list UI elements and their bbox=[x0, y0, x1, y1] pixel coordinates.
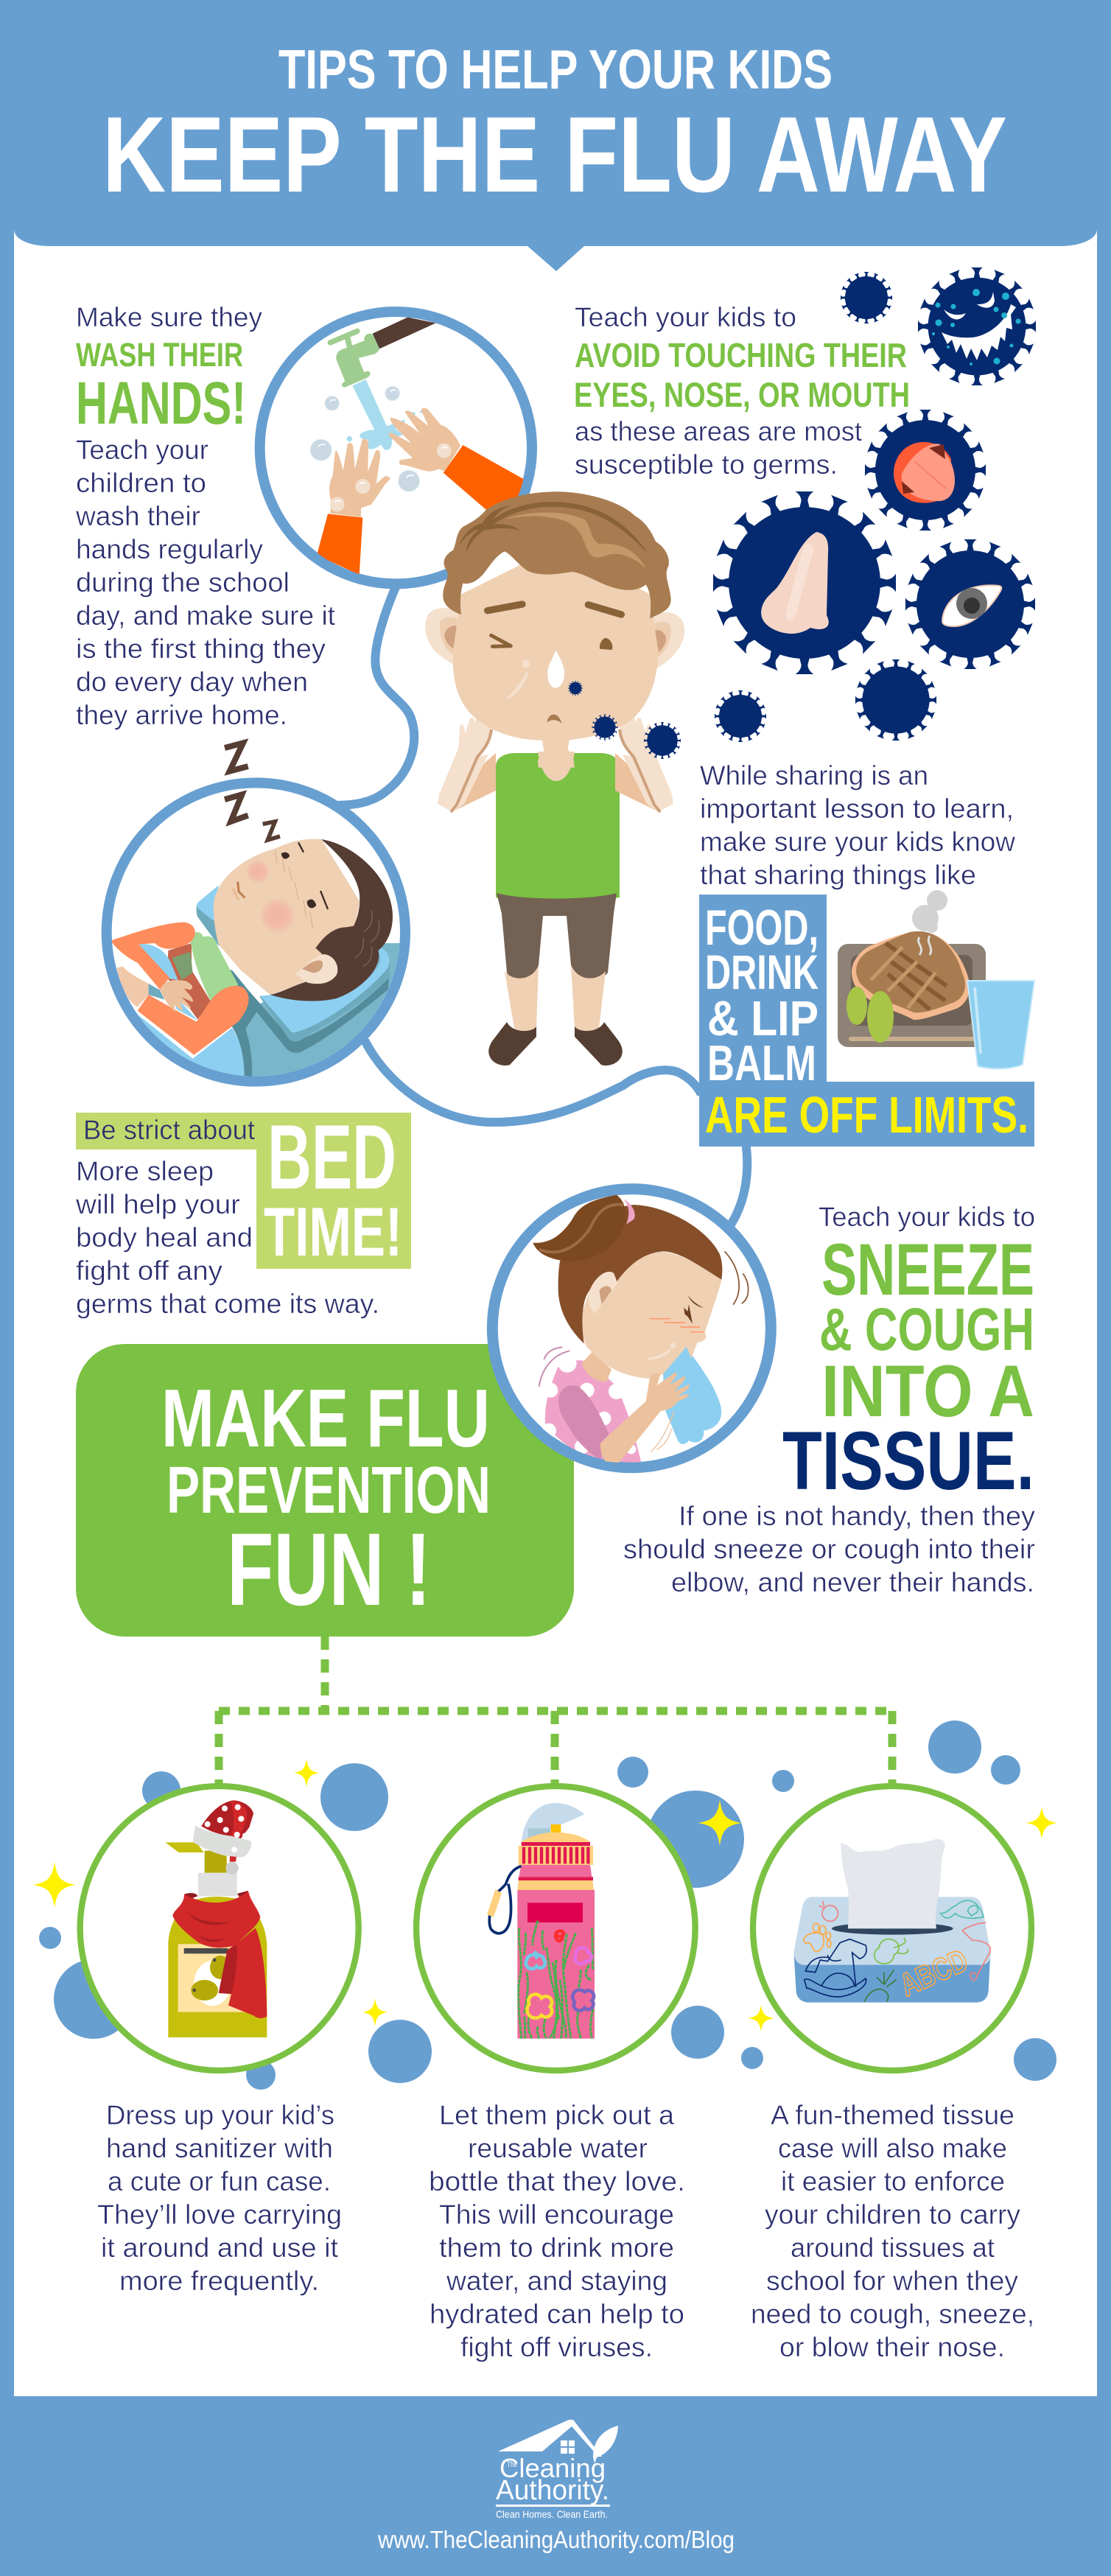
right arm bbox=[615, 716, 673, 813]
footer logo: The bbox=[507, 2460, 517, 2469]
eye bbox=[942, 585, 1001, 626]
eyes and wrinkles bbox=[281, 853, 316, 908]
text block: sharing: that sharing things like bbox=[700, 860, 976, 890]
meadow pattern bbox=[519, 1921, 593, 2039]
text block: sharing: important lesson to learn, bbox=[700, 794, 1014, 824]
icon: girl sneezing circle bbox=[492, 1189, 771, 1468]
santa hat bbox=[201, 1800, 253, 1842]
ear bbox=[295, 954, 337, 984]
logo roof bbox=[498, 2420, 602, 2457]
text block: sanitizer: a cute or fun case. bbox=[108, 2166, 331, 2197]
text block: sleep: body heal and bbox=[76, 1222, 253, 1253]
text block: water bottle: Let them pick out a bbox=[439, 2100, 674, 2130]
text block: avoid touching: as these areas are most bbox=[575, 416, 863, 447]
text block: wash hands: day, and make sure it bbox=[76, 601, 336, 631]
text block: sleep bbox=[75, 1156, 379, 1319]
pipe bbox=[373, 318, 436, 349]
text block: water bottle: This will encourage bbox=[439, 2199, 674, 2230]
icon: hand washing circle bbox=[260, 312, 532, 584]
hair bbox=[270, 839, 393, 1001]
text block: tissue case: A fun-themed tissue bbox=[771, 2100, 1014, 2130]
header banner bbox=[0, 0, 1111, 271]
tissue bbox=[663, 1347, 721, 1444]
text block: sneeze bbox=[623, 1202, 1036, 1597]
text block: sneeze: If one is not handy, then they bbox=[679, 1501, 1036, 1531]
text block: sneeze: elbow, and never their hands. bbox=[671, 1567, 1034, 1597]
hair bbox=[558, 1205, 722, 1343]
heading: into a: INTO A bbox=[821, 1350, 1034, 1432]
heading: tissue: TISSUE. bbox=[782, 1415, 1034, 1507]
torso bbox=[167, 943, 211, 1019]
connector line between tips bbox=[333, 582, 747, 1225]
nose germ bbox=[713, 491, 896, 674]
soap bubbles bbox=[310, 386, 419, 491]
germs on boy bbox=[568, 681, 681, 759]
icon: germs group bbox=[713, 267, 1036, 742]
text block: sanitizer: They’ll love carrying bbox=[97, 2199, 342, 2230]
sleeve right bbox=[444, 445, 525, 511]
heading: and cough: & COUGH bbox=[819, 1296, 1034, 1363]
title line one: TIPS TO HELP YOUR KIDS bbox=[278, 38, 833, 100]
text block: tissue case: need to cough, sneeze, bbox=[751, 2299, 1034, 2329]
icon: tissue box bbox=[753, 1786, 1031, 2071]
footer logo: Cleaning bbox=[500, 2453, 606, 2483]
text block: tissue case: it easier to enforce bbox=[781, 2166, 1005, 2197]
panel: make flu prevention fun: FUN ! bbox=[227, 1511, 431, 1627]
text block: water bottle: reusable water bbox=[468, 2133, 648, 2163]
text block: water bottle: hydrated can help to bbox=[430, 2299, 684, 2329]
doodle letters: ABCD bbox=[895, 1943, 973, 2003]
text block: tissue case: case will also make bbox=[778, 2133, 1007, 2163]
neck bbox=[582, 1352, 611, 1382]
text block: wash hands: Make sure they bbox=[76, 302, 262, 332]
text block: avoid touching: susceptible to germs. bbox=[575, 449, 838, 480]
text block: avoid touching bbox=[574, 302, 910, 480]
text block: sleep: will help your bbox=[75, 1189, 240, 1219]
callout: bed time bbox=[76, 1107, 411, 1270]
face bbox=[582, 1252, 721, 1379]
panel: food drink lip balm callout: & LIP bbox=[707, 991, 819, 1046]
hair bbox=[443, 491, 671, 618]
text block: tissue case: your children to carry bbox=[765, 2199, 1020, 2230]
arms bbox=[139, 944, 178, 980]
shorts bbox=[497, 893, 617, 981]
text block: sleep: germs that come its way. bbox=[76, 1289, 379, 1319]
text block: sanitizer: it around and use it bbox=[101, 2233, 339, 2263]
heading: bed: BED bbox=[267, 1107, 396, 1208]
panel: food drink lip balm callout bbox=[699, 895, 1034, 1147]
eyebrows bbox=[488, 604, 621, 615]
motion lines bbox=[539, 1347, 569, 1387]
text block: tissue case: or blow their nose. bbox=[779, 2332, 1005, 2362]
tongue germ bbox=[865, 410, 986, 531]
tissue bbox=[841, 1839, 945, 1928]
scarf bbox=[184, 1891, 250, 1901]
wink eye bbox=[491, 635, 511, 646]
footer logo: Clean Homes. Clean Earth. bbox=[496, 2508, 608, 2520]
text block: sharing: make sure your kids know bbox=[700, 827, 1015, 857]
neck and shirt bbox=[496, 753, 620, 902]
hands bbox=[329, 408, 460, 517]
panel: food drink lip balm callout: BALM bbox=[707, 1035, 816, 1091]
mouth bbox=[238, 882, 245, 897]
icon: sleeping child circle bbox=[107, 743, 405, 1085]
water bbox=[352, 379, 405, 450]
panel: make flu prevention fun bbox=[76, 1344, 574, 1637]
footer url: www.TheCleaningAuthority.com/Blog bbox=[377, 2526, 735, 2553]
z letters bbox=[225, 743, 280, 840]
cheeks bbox=[248, 861, 268, 881]
text block: wash hands bbox=[75, 302, 336, 730]
text block: sanitizer: Dress up your kid’s bbox=[106, 2100, 334, 2130]
monster germ bbox=[918, 267, 1036, 385]
text block: tissue case: around tissues at bbox=[791, 2233, 995, 2263]
head bbox=[425, 491, 684, 768]
eye germ bbox=[905, 539, 1035, 669]
text block: water bottle: bottle that they love. bbox=[429, 2166, 685, 2197]
icon: steak on tray and glass of water bbox=[838, 890, 1034, 1069]
text block: wash hands: wash their bbox=[75, 501, 200, 531]
text block: wash hands: children to bbox=[76, 468, 206, 498]
text block: wash hands: during the school bbox=[76, 567, 290, 598]
text block: wash hands: do every day when bbox=[76, 667, 308, 697]
text block: water bottle bbox=[429, 2100, 685, 2362]
eye bbox=[684, 1295, 704, 1324]
left arm bbox=[438, 716, 496, 813]
text block: sanitizer bbox=[97, 2100, 342, 2296]
bottle loop strap bbox=[489, 1866, 521, 1933]
heading: sneeze: SNEEZE bbox=[821, 1228, 1034, 1310]
text block: wash hands: Teach your bbox=[76, 435, 208, 465]
text block: sneeze: Teach your kids to bbox=[819, 1202, 1035, 1232]
arm and hand bbox=[600, 1372, 690, 1463]
scarf bbox=[190, 932, 238, 1002]
legs bbox=[505, 965, 606, 1033]
heading: hands: HANDS! bbox=[76, 370, 246, 437]
heading: eyes nose mouth: EYES, NOSE, OR MOUTH bbox=[574, 375, 910, 414]
tap bbox=[330, 331, 379, 388]
logo leaf bbox=[593, 2426, 618, 2463]
face bbox=[214, 839, 360, 995]
text block: tissue case bbox=[751, 2100, 1034, 2362]
text block: avoid touching: Teach your kids to bbox=[575, 302, 796, 332]
text block: water bottle: them to drink more bbox=[439, 2233, 674, 2263]
text block: sleep: fight off any bbox=[76, 1256, 223, 1286]
illustration: boy bbox=[425, 491, 684, 1065]
dress bbox=[545, 1360, 642, 1464]
small germ top bbox=[841, 272, 892, 323]
panel: food drink lip balm callout: DRINK bbox=[705, 945, 819, 999]
text block: sharing bbox=[700, 760, 1015, 890]
sleeve left bbox=[317, 514, 362, 575]
text block: wash hands: hands regularly bbox=[76, 534, 264, 564]
shoes bbox=[488, 1022, 623, 1065]
text block: sleep: More sleep bbox=[76, 1156, 214, 1186]
text block: wash hands: they arrive home. bbox=[76, 700, 287, 730]
panel: make flu prevention fun: PREVENTION bbox=[167, 1454, 491, 1527]
text block: wash hands: is the first thing they bbox=[76, 634, 326, 664]
flowers bbox=[526, 1931, 594, 2018]
nose bbox=[761, 532, 829, 634]
heading: avoid touching their: AVOID TOUCHING THEIR bbox=[575, 336, 907, 374]
icon: hand sanitizer in scarf bbox=[80, 1786, 359, 2071]
icon: reusable water bottle bbox=[416, 1786, 695, 2071]
text block: sharing: While sharing is an bbox=[700, 760, 928, 791]
text block: sanitizer: hand sanitizer with bbox=[106, 2133, 333, 2163]
panel: make flu prevention fun: MAKE FLU bbox=[161, 1373, 490, 1464]
text block: tissue case: school for when they bbox=[766, 2266, 1019, 2296]
ear bbox=[589, 1272, 617, 1314]
medium germ bottom bbox=[855, 659, 936, 741]
text block: water bottle: water, and staying bbox=[446, 2266, 667, 2296]
text block: water bottle: fight off viruses. bbox=[460, 2332, 653, 2362]
heading: time: TIME! bbox=[264, 1193, 402, 1270]
footer logo bbox=[496, 2420, 618, 2520]
ponytail bbox=[533, 1195, 626, 1261]
pillow bbox=[260, 945, 390, 1033]
decorative blue bubbles and sparkles bbox=[33, 1721, 1057, 2090]
tiny germ bottom bbox=[715, 690, 766, 742]
mouth bbox=[547, 715, 562, 724]
footer logo: Authority. bbox=[496, 2475, 609, 2506]
heading: wash their: WASH THEIR bbox=[76, 336, 243, 374]
open eye bbox=[600, 638, 612, 650]
runny nose drop bbox=[547, 651, 564, 688]
callout: bed time: Be strict about bbox=[83, 1115, 256, 1145]
panel: food drink lip balm callout: FOOD, bbox=[705, 900, 819, 956]
doodles bbox=[804, 1900, 990, 2002]
text block: sneeze: should sneeze or cough into their bbox=[623, 1534, 1035, 1564]
dashed connector to fun tips bbox=[219, 1637, 892, 1783]
text block: sanitizer: more frequently. bbox=[119, 2266, 319, 2296]
